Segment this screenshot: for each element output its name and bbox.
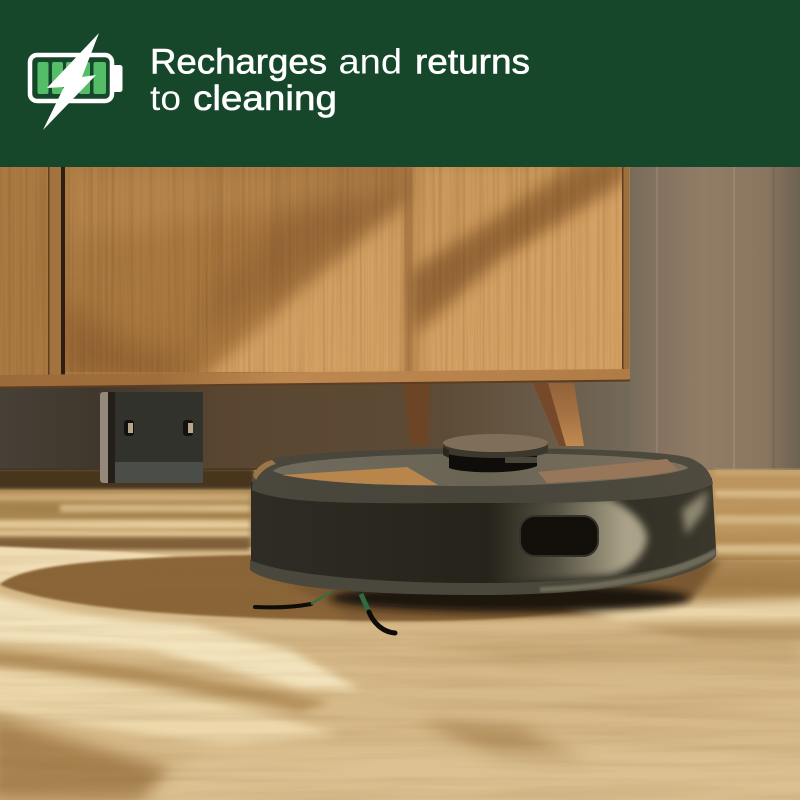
title: cleaning [193, 79, 337, 118]
sunlit patch on side wall [502, 500, 652, 582]
bright patch left [0, 546, 178, 585]
under-body shadow [330, 584, 690, 612]
shelf edge [0, 369, 630, 388]
wood grain [0, 167, 630, 375]
title: to [150, 79, 181, 118]
wall under cabinet [0, 380, 630, 472]
bottom bumper [250, 546, 716, 595]
floor [0, 468, 800, 800]
rim ends [253, 460, 276, 480]
title [150, 42, 530, 118]
lidar turret [443, 434, 548, 472]
icon: charging battery [30, 33, 122, 130]
vent window [520, 516, 598, 556]
robot vacuum [250, 434, 716, 633]
photo: room background [0, 160, 800, 800]
top plate [273, 453, 688, 486]
dock contacts [124, 420, 193, 436]
side brushes [255, 591, 395, 633]
cabinet frame [49, 167, 61, 375]
side-wall highlight [682, 490, 708, 535]
charging dock [100, 392, 203, 483]
light beams on floor [0, 592, 800, 800]
curtain [625, 167, 800, 472]
robot cast shadow [0, 555, 640, 621]
floor grain [0, 490, 800, 800]
side wall [251, 478, 716, 594]
title: returns [415, 42, 530, 82]
cabinet legs [403, 383, 584, 446]
title: and [338, 42, 402, 82]
header band [0, 0, 800, 167]
title: Recharges [150, 42, 327, 82]
wood reflection on plate [282, 467, 438, 485]
sunlight and shadow bands [65, 167, 622, 372]
cabinet [0, 160, 640, 388]
top rim [252, 448, 713, 503]
